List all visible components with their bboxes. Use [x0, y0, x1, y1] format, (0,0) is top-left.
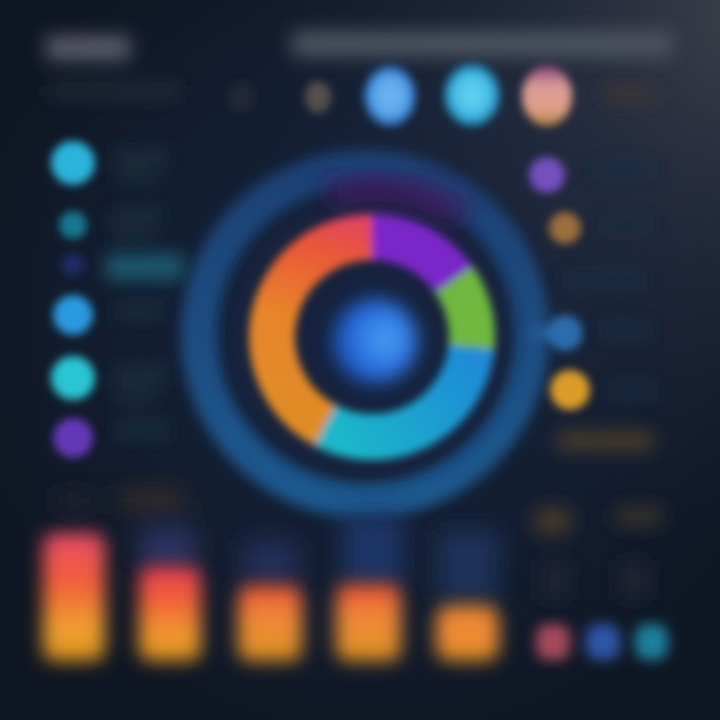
icon: blue — [547, 315, 583, 351]
icon: aqua — [51, 356, 95, 400]
icon: amber — [549, 212, 581, 244]
subtitle — [292, 31, 672, 57]
left legend labels — [112, 150, 169, 436]
bar 3 — [238, 585, 302, 661]
segment: purple — [372, 237, 454, 280]
donut chart — [272, 237, 472, 437]
top icons row — [228, 64, 572, 126]
swatches — [536, 624, 668, 660]
swatch: pink — [536, 624, 570, 660]
title — [46, 36, 130, 60]
icon: blue — [53, 295, 93, 335]
header — [46, 31, 672, 98]
panel: bottom right mini chart — [535, 506, 668, 660]
top right label — [605, 86, 655, 102]
headers — [535, 506, 662, 600]
bars — [43, 533, 499, 661]
bar 1 — [43, 533, 105, 661]
bar 2 — [139, 566, 201, 661]
swatch: teal — [635, 624, 668, 660]
ring inner disc — [225, 193, 511, 479]
bar 5 — [436, 605, 499, 661]
highlight label — [106, 254, 184, 280]
top arc accent — [330, 189, 462, 216]
segment: cyan — [325, 348, 472, 437]
icon: purple — [53, 418, 93, 458]
icon: grey circle — [305, 81, 331, 113]
icon: blue circle — [364, 66, 416, 126]
bar 4 — [336, 584, 401, 661]
icon: small dim — [228, 82, 254, 112]
segment: orange — [272, 237, 372, 425]
icon: cyan — [51, 141, 95, 185]
icon: indigo — [61, 253, 85, 277]
connector — [530, 325, 560, 341]
bar headers — [52, 492, 498, 600]
icon: pink circle — [522, 66, 572, 126]
swatch: blue — [586, 624, 620, 660]
icon: purple — [529, 157, 565, 193]
outer ring — [200, 169, 530, 499]
centre hub — [332, 298, 418, 384]
right legend labels — [558, 164, 658, 450]
segment: green — [454, 280, 472, 348]
icon: teal — [59, 211, 87, 239]
icon: cyan circle — [444, 64, 500, 126]
panel: right legend — [529, 157, 590, 410]
bar chart — [43, 492, 499, 661]
icon: gold — [550, 370, 590, 410]
panel: left legend — [51, 141, 95, 458]
caption — [50, 84, 180, 98]
